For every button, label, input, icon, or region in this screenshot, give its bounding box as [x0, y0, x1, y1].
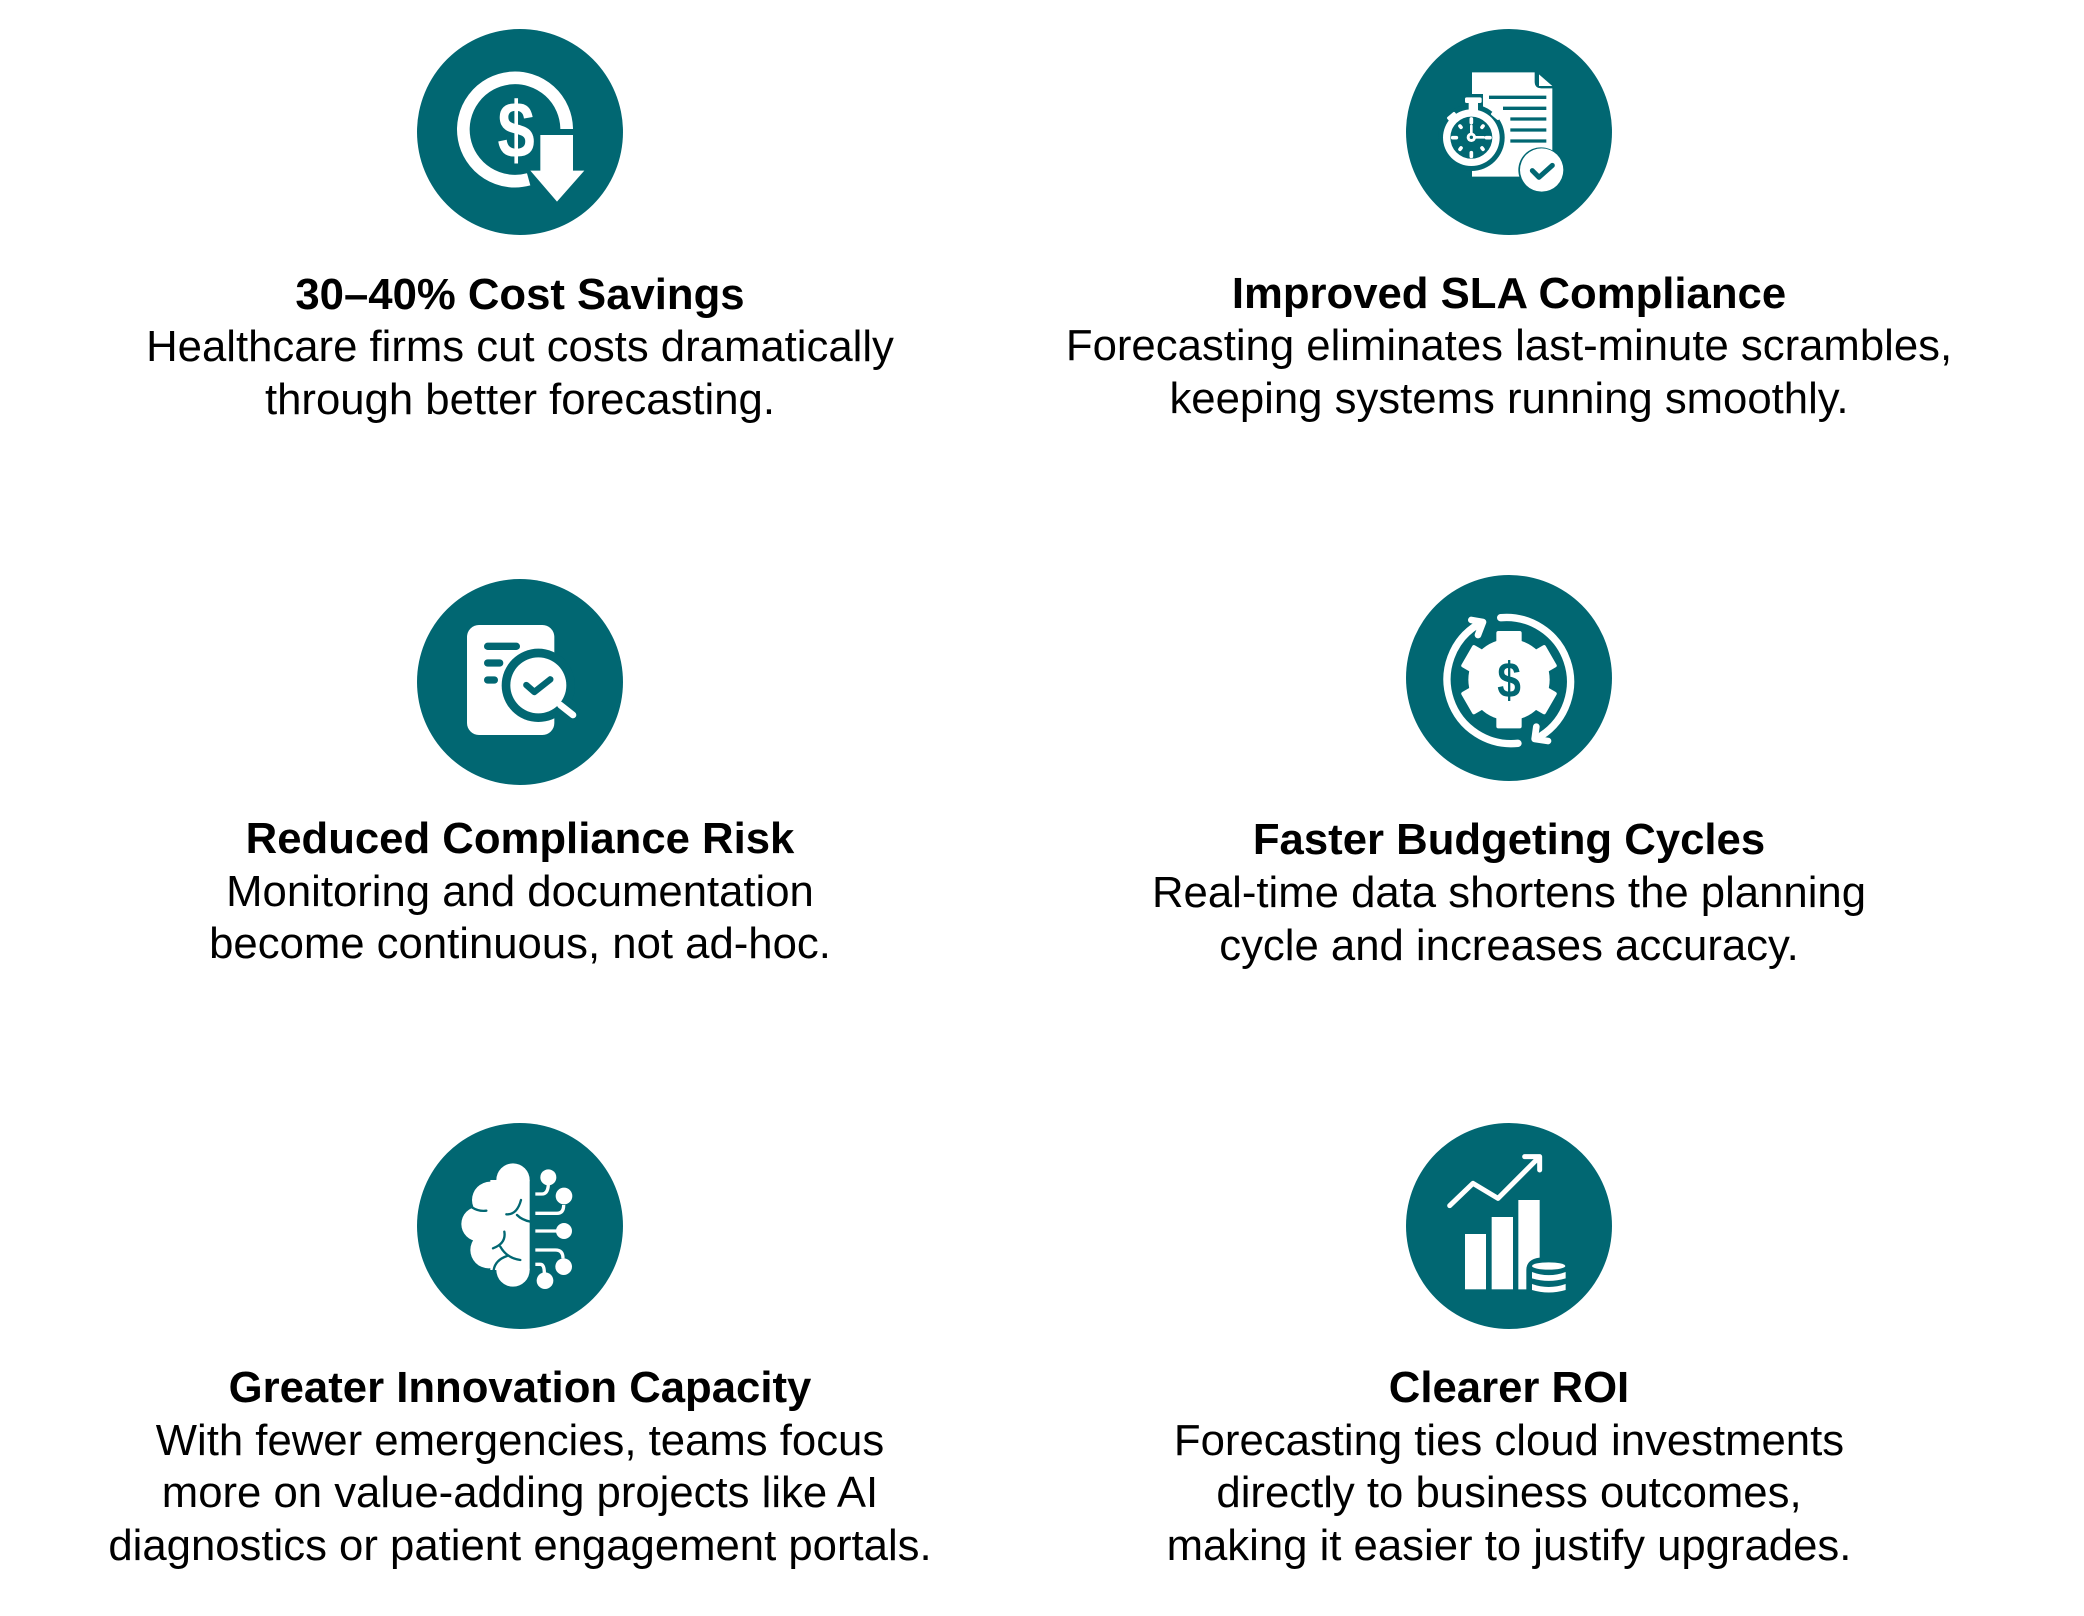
- text: innovation capacity description: more on value-adding projects like AI: [162, 1468, 878, 1517]
- text: budgeting cycles description: Real-time data shortens the planning: [1152, 868, 1866, 917]
- panel: compliance risk: [209, 579, 831, 968]
- heading: cost savings: 30–40% Cost Savings: [295, 270, 745, 319]
- text: compliance risk description: [209, 867, 831, 968]
- heading: budgeting cycles: Faster Budgeting Cycles: [1253, 815, 1765, 864]
- panel: clearer ROI: [1167, 1123, 1851, 1570]
- panel: budgeting cycles: [1152, 575, 1866, 970]
- text: SLA compliance description: Forecasting eliminates last-minute scrambles,: [1066, 321, 1952, 370]
- heading: SLA compliance: Improved SLA Compliance: [1232, 269, 1786, 318]
- heading: compliance risk: Reduced Compliance Risk: [246, 814, 795, 863]
- icon: dollar with down arrow: $: [497, 85, 535, 175]
- text: cost savings description: through better forecasting.: [265, 375, 775, 424]
- text: budgeting cycles description: cycle and increases accuracy.: [1219, 921, 1799, 970]
- icon: dollar with down arrow: [417, 29, 623, 235]
- text: clearer ROI description: directly to business outcomes,: [1216, 1468, 1802, 1517]
- text: clearer ROI description: [1167, 1416, 1851, 1570]
- text: SLA compliance description: keeping systems running smoothly.: [1169, 374, 1849, 423]
- text: compliance risk description: become continuous, not ad-hoc.: [209, 919, 831, 968]
- panel: cost savings: [146, 29, 894, 424]
- text: clearer ROI description: Forecasting ties cloud investments: [1174, 1416, 1844, 1465]
- icon: document with stopwatch and check: [1406, 29, 1612, 235]
- text: budgeting cycles description: [1152, 868, 1866, 970]
- icon: document with magnifier and check: [417, 579, 623, 785]
- text: clearer ROI description: making it easier to justify upgrades.: [1167, 1521, 1851, 1570]
- heading: clearer ROI: Clearer ROI: [1389, 1363, 1629, 1412]
- heading: innovation capacity: Greater Innovation Capacity: [229, 1363, 812, 1412]
- text: compliance risk description: Monitoring and documentation: [226, 867, 814, 916]
- panel: SLA compliance: [1066, 29, 1952, 423]
- text: cost savings description: Healthcare firms cut costs dramatically: [146, 322, 894, 371]
- text: cost savings description: [146, 322, 894, 424]
- icon: rising bar chart with coins: [1406, 1123, 1612, 1329]
- text: SLA compliance description: [1066, 321, 1952, 423]
- icon: brain with circuit nodes: [417, 1123, 623, 1329]
- text: innovation capacity description: With fewer emergencies, teams focus: [156, 1416, 884, 1465]
- text: innovation capacity description: diagnostics or patient engagement portals.: [108, 1521, 932, 1570]
- icon: gear with dollar and cycle arrows: $: [1497, 652, 1521, 708]
- icon: gear with dollar and cycle arrows: [1406, 575, 1612, 781]
- panel: innovation capacity: [108, 1123, 932, 1570]
- text: innovation capacity description: [108, 1416, 932, 1570]
